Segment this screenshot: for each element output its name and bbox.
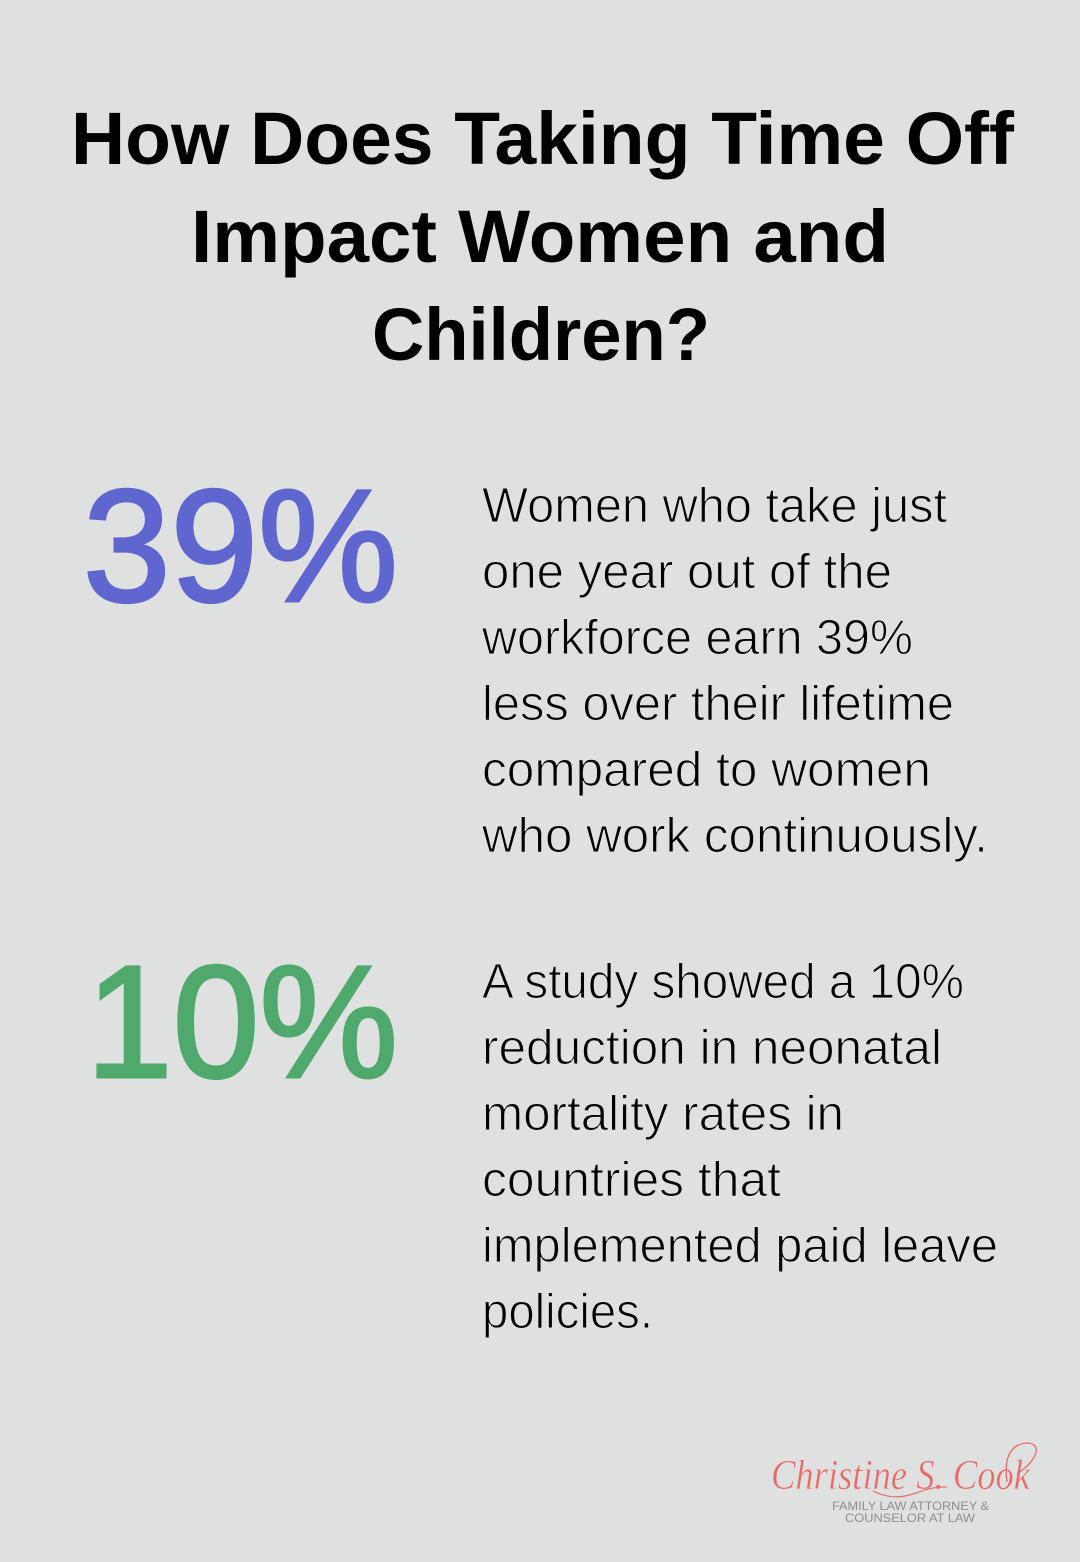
- stat description: neonatal mortality: countries that: [482, 1153, 781, 1207]
- stat description: lifetime earnings: one year out of the: [482, 545, 892, 599]
- title: [71, 97, 1014, 376]
- stat description: neonatal mortality: mortality rates in: [482, 1087, 844, 1141]
- logo: Christine S. Cook: [771, 1443, 1036, 1525]
- stat description: neonatal mortality: policies.: [482, 1285, 653, 1339]
- stat description: lifetime earnings: [481, 479, 988, 863]
- stat description: neonatal mortality: implemented paid leave: [482, 1219, 998, 1273]
- stat: 39%: [83, 456, 988, 863]
- logo tagline: [832, 1501, 989, 1525]
- logo tagline: COUNSELOR AT LAW: [845, 1513, 975, 1525]
- stat number: 39%: 39%: [83, 456, 398, 635]
- stat description: neonatal mortality: A study showed a 10%: [482, 955, 964, 1009]
- stat: 10%: [86, 932, 998, 1339]
- title: Impact Women and: [191, 195, 889, 278]
- logo tagline: FAMILY LAW ATTORNEY &: [832, 1501, 989, 1513]
- stat number: 10%: 10%: [86, 932, 398, 1111]
- stat description: lifetime earnings: who work continuously.: [481, 809, 988, 863]
- logo signature: Christine S. Cook: [771, 1453, 1031, 1499]
- stat description: neonatal mortality: [482, 955, 998, 1339]
- stat description: lifetime earnings: workforce earn 39%: [481, 611, 913, 665]
- stat description: neonatal mortality: reduction in neonatal: [482, 1021, 942, 1075]
- title: Children?: [372, 293, 710, 376]
- stat description: lifetime earnings: Women who take just: [482, 479, 947, 533]
- logo swash: [873, 1487, 947, 1497]
- title: How Does Taking Time Off: [71, 97, 1014, 180]
- stat description: lifetime earnings: compared to women: [482, 743, 931, 797]
- stat description: lifetime earnings: less over their lifetime: [482, 677, 954, 731]
- logo k loop: [1006, 1443, 1036, 1482]
